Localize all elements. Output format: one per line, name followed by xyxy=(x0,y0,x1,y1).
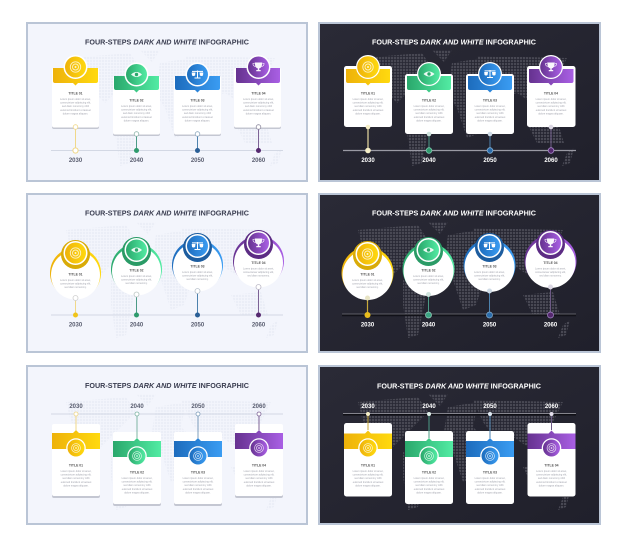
heading: FOUR-STEPS DARK AND WHITE INFOGRAPHIC xyxy=(85,208,249,218)
body text: dolore magna aliquam. xyxy=(416,119,442,122)
title 02: TITLE 02 xyxy=(422,470,436,474)
badge: target icon xyxy=(480,446,500,466)
body text: consectetuer adipiscing elit, xyxy=(536,102,567,105)
body text: sed diam nonummy nibh xyxy=(538,477,566,480)
badge: scale icon xyxy=(478,62,502,86)
step 1 card xyxy=(344,404,392,496)
year: 2030 xyxy=(69,322,83,328)
body text: Lorem ipsum dolor sit amet, xyxy=(60,98,91,101)
step 1 circle xyxy=(50,240,101,328)
step 4 card xyxy=(235,404,283,498)
body text: sed diam nonummy. xyxy=(125,282,148,285)
body text: consectetuer adipiscing elit, xyxy=(60,102,91,105)
badge: target icon xyxy=(66,438,86,458)
body text: Lorem ipsum dolor sit amet, xyxy=(535,268,566,270)
title 03: TITLE 03 xyxy=(190,98,205,102)
body text: dolore magna aliquam. xyxy=(124,119,150,122)
world map backdrop xyxy=(362,50,574,166)
body text: Lorem ipsum dolor sit amet, xyxy=(475,477,506,480)
title 03: TITLE 03 xyxy=(483,470,497,474)
connector xyxy=(136,134,138,150)
panel background xyxy=(319,194,600,352)
world map backdrop xyxy=(66,222,278,338)
title 03: TITLE 03 xyxy=(482,264,497,268)
connector xyxy=(136,294,138,315)
body text: consectetuer adipiscing elit, xyxy=(244,474,275,477)
step 2 card xyxy=(405,404,453,504)
body text: Lorem ipsum dolor sit amet, xyxy=(244,470,275,473)
body text: consectetuer adipiscing elit, xyxy=(122,481,153,484)
step 2 card xyxy=(113,404,161,506)
timeline axis xyxy=(51,150,283,152)
body text: dolore magna aliquam. xyxy=(185,491,211,494)
year: 2060 xyxy=(252,404,266,410)
badge: target icon xyxy=(356,242,380,266)
step 4 card xyxy=(528,404,576,496)
title 01: TITLE 01 xyxy=(361,92,375,96)
body text: euismod tincidunt ut laoreet xyxy=(414,488,445,491)
body text: Lorem ipsum dolor sit amet, xyxy=(121,275,152,278)
timeline axis xyxy=(343,414,576,416)
step 3 circle xyxy=(464,233,516,328)
body text: euismod tincidunt ut laoreet xyxy=(414,116,445,119)
step 1 card xyxy=(52,404,100,498)
body text: Lorem ipsum dolor sit amet, xyxy=(536,98,567,101)
step 2 circle xyxy=(402,237,454,328)
body text: dolore magna aliquam. xyxy=(477,491,503,494)
body text: sed diam nonummy. xyxy=(478,278,501,281)
body text: euismod tincidunt ut laoreet xyxy=(244,481,275,484)
badge: target icon xyxy=(358,438,378,458)
body text: consectetuer adipiscing elit, xyxy=(121,109,152,112)
connector xyxy=(74,298,76,315)
step 4 circle xyxy=(524,230,576,328)
body text: sed diam nonummy nibh xyxy=(62,477,90,480)
title 03: TITLE 03 xyxy=(191,470,205,474)
body text: Lorem ipsum dolor sit amet, xyxy=(353,470,384,473)
body text: Lorem ipsum dolor sit amet, xyxy=(536,470,567,473)
badge: eye icon xyxy=(124,238,148,262)
year: 2050 xyxy=(483,404,497,410)
badge: target icon xyxy=(127,446,147,466)
badge: scale icon xyxy=(186,234,210,258)
body text: Lorem ipsum dolor sit amet, xyxy=(243,98,274,101)
badge: target icon xyxy=(542,438,561,458)
timeline axis xyxy=(342,314,576,316)
year: 2030 xyxy=(69,158,83,164)
body text: Lorem ipsum dolor sit amet, xyxy=(182,271,213,274)
year: 2060 xyxy=(252,322,266,328)
step 2 card xyxy=(113,62,160,164)
panel background xyxy=(27,366,307,524)
year: 2030 xyxy=(361,322,375,328)
connector xyxy=(366,298,368,315)
timeline axis xyxy=(51,314,283,316)
body text: sed diam nonummy nibh xyxy=(537,105,565,108)
title 04: TITLE 04 xyxy=(252,464,266,468)
body text: consectetuer adipiscing elit, xyxy=(414,481,445,484)
title 04: TITLE 04 xyxy=(544,464,559,468)
body text: sed diam nonummy nibh xyxy=(245,477,273,480)
year: 2040 xyxy=(422,322,436,328)
step 3 card xyxy=(174,62,221,164)
title 02: TITLE 02 xyxy=(421,268,436,272)
body text: dolore magna aliquam. xyxy=(539,484,565,487)
panel: light infographic with rectangular cards xyxy=(27,23,307,181)
title 04: TITLE 04 xyxy=(544,92,558,96)
panel background xyxy=(27,23,307,181)
connector xyxy=(74,127,76,150)
year: 2060 xyxy=(544,158,558,164)
body text: euismod tincidunt ut laoreet xyxy=(475,488,506,491)
title 01: TITLE 01 xyxy=(360,272,375,276)
body text: euismod tincidunt ut laoreet xyxy=(121,116,152,119)
year: 2050 xyxy=(191,404,205,410)
year: 2030 xyxy=(361,404,375,410)
title 02: TITLE 02 xyxy=(129,98,144,102)
world map backdrop xyxy=(358,394,570,510)
title 02: TITLE 02 xyxy=(129,268,144,272)
heading: FOUR-STEPS DARK AND WHITE INFOGRAPHIC xyxy=(377,382,541,390)
body text: sed diam nonummy nibh xyxy=(62,105,90,108)
body text: sed diam nonummy nibh xyxy=(354,105,382,108)
badge: trophy icon xyxy=(538,231,562,255)
body text: sed diam nonummy. xyxy=(539,275,562,278)
body text: dolore magna aliquam. xyxy=(185,119,211,122)
year: 2030 xyxy=(69,404,83,410)
year: 2050 xyxy=(191,322,205,328)
badge: target icon xyxy=(64,241,88,265)
panel: dark infographic with banded cards xyxy=(319,366,600,524)
body text: consectetuer adipiscing elit, xyxy=(61,474,92,477)
body text: consectetuer adipiscing elit, xyxy=(60,283,91,286)
body text: consectetuer adipiscing elit, xyxy=(183,481,214,484)
connector xyxy=(367,127,369,150)
body text: euismod tincidunt ut laoreet xyxy=(61,481,92,484)
title 04: TITLE 04 xyxy=(251,92,266,96)
panel: light infographic with circular cards xyxy=(27,194,307,352)
body text: Lorem ipsum dolor sit amet, xyxy=(182,105,213,108)
body text: euismod tincidunt ut laoreet xyxy=(182,116,213,119)
badge: trophy icon xyxy=(539,55,563,79)
badge: eye icon xyxy=(124,62,148,86)
body text: sed diam nonummy nibh xyxy=(476,484,504,487)
body text: sed diam nonummy. xyxy=(186,278,209,281)
connector xyxy=(196,134,198,150)
timeline axis xyxy=(343,150,576,152)
step 4 card xyxy=(234,55,281,164)
body text: dolore magna aliquam. xyxy=(63,112,89,115)
body text: sed diam nonummy. xyxy=(247,275,270,278)
step 3 card xyxy=(466,62,514,164)
title 02: TITLE 02 xyxy=(422,98,436,102)
step 1 circle xyxy=(342,241,394,328)
body text: consectetuer adipiscing elit, xyxy=(475,481,506,484)
body text: Lorem ipsum dolor sit amet, xyxy=(413,275,444,278)
body text: Lorem ipsum dolor sit amet, xyxy=(183,477,214,480)
body text: Lorem ipsum dolor sit amet, xyxy=(414,477,445,480)
year: 2040 xyxy=(130,404,144,410)
connector xyxy=(550,127,552,150)
body text: sed diam nonummy nibh xyxy=(476,112,504,115)
world map backdrop xyxy=(358,222,570,338)
body text: consectetuer adipiscing elit, xyxy=(353,102,384,105)
step 2 card xyxy=(405,62,453,164)
connector xyxy=(258,127,260,150)
body text: sed diam nonummy. xyxy=(356,286,379,289)
connector xyxy=(488,291,490,315)
badge: trophy icon xyxy=(246,231,270,255)
body text: euismod tincidunt ut laoreet xyxy=(536,109,567,112)
title 03: TITLE 03 xyxy=(190,264,205,268)
connector xyxy=(428,134,430,150)
body text: Lorem ipsum dolor sit amet, xyxy=(414,105,445,108)
panel background xyxy=(27,194,307,352)
step 3 circle xyxy=(172,233,223,328)
body text: consectetuer adipiscing elit, xyxy=(474,275,505,278)
body text: euismod tincidunt ut laoreet xyxy=(536,481,567,484)
body text: Lorem ipsum dolor sit amet, xyxy=(352,279,383,282)
year: 2050 xyxy=(483,158,497,164)
body text: dolore magna aliquam. xyxy=(355,112,381,115)
step 4 circle xyxy=(233,230,284,328)
badge: scale icon xyxy=(186,62,210,86)
body text: dolore magna aliquam. xyxy=(246,112,272,115)
body text: Lorem ipsum dolor sit amet, xyxy=(121,105,152,108)
body text: Lorem ipsum dolor sit amet, xyxy=(353,98,384,101)
title 01: TITLE 01 xyxy=(361,464,375,468)
body text: consectetuer adipiscing elit, xyxy=(352,283,383,286)
body text: consectetuer adipiscing elit, xyxy=(182,275,213,278)
body text: sed diam nonummy. xyxy=(64,286,87,289)
body text: consectetuer adipiscing elit, xyxy=(475,109,506,112)
step 4 card xyxy=(527,55,576,164)
connector xyxy=(196,291,198,315)
year: 2060 xyxy=(544,322,558,328)
year: 2040 xyxy=(130,158,144,164)
body text: Lorem ipsum dolor sit amet, xyxy=(61,470,92,473)
heading: FOUR-STEPS DARK AND WHITE INFOGRAPHIC xyxy=(372,208,536,218)
heading: FOUR-STEPS DARK AND WHITE INFOGRAPHIC xyxy=(85,38,249,47)
badge: eye icon xyxy=(416,238,440,262)
badge: target icon xyxy=(419,446,439,466)
heading: FOUR-STEPS DARK AND WHITE INFOGRAPHIC xyxy=(372,38,536,47)
body text: dolore magna aliquam. xyxy=(124,491,150,494)
body text: sed diam nonummy nibh xyxy=(184,112,212,115)
body text: sed diam nonummy nibh xyxy=(415,484,443,487)
panel: dark infographic with circular cards xyxy=(319,194,600,352)
body text: consectetuer adipiscing elit, xyxy=(535,271,566,274)
body text: euismod tincidunt ut laoreet xyxy=(475,116,506,119)
body text: sed diam nonummy. xyxy=(417,282,440,285)
body text: sed diam nonummy nibh xyxy=(184,484,212,487)
year: 2030 xyxy=(361,158,375,164)
title 04: TITLE 04 xyxy=(251,261,266,265)
badge: scale icon xyxy=(478,234,502,258)
body text: dolore magna aliquam. xyxy=(416,491,442,494)
badge: target icon xyxy=(64,55,88,79)
step 1 card xyxy=(344,55,392,164)
body text: dolore magna aliquam. xyxy=(477,119,503,122)
year: 2040 xyxy=(422,158,436,164)
badge: target icon xyxy=(188,446,208,466)
body text: dolore magna aliquam. xyxy=(355,484,381,487)
connector xyxy=(489,134,491,150)
year: 2050 xyxy=(483,322,497,328)
body text: consectetuer adipiscing elit, xyxy=(414,109,445,112)
step 2 circle xyxy=(111,237,162,328)
title 03: TITLE 03 xyxy=(483,98,497,102)
world map backdrop xyxy=(70,50,282,166)
body text: consectetuer adipiscing elit, xyxy=(243,271,274,274)
panel: light infographic with banded cards xyxy=(27,366,307,524)
body text: Lorem ipsum dolor sit amet, xyxy=(122,477,153,480)
title 04: TITLE 04 xyxy=(543,261,558,265)
body text: consectetuer adipiscing elit, xyxy=(243,102,274,105)
body text: dolore magna aliquam. xyxy=(538,112,564,115)
badge: eye icon xyxy=(417,62,441,86)
body text: euismod tincidunt ut laoreet xyxy=(243,109,274,112)
body text: Lorem ipsum dolor sit amet, xyxy=(474,271,505,274)
body text: euismod tincidunt ut laoreet xyxy=(60,109,91,112)
badge: trophy icon xyxy=(246,55,270,79)
timeline axis xyxy=(51,413,283,415)
step 3 card xyxy=(174,404,222,506)
panel background xyxy=(319,23,600,181)
year: 2060 xyxy=(252,158,266,164)
year: 2060 xyxy=(545,404,559,410)
body text: dolore magna aliquam. xyxy=(63,484,89,487)
body text: consectetuer adipiscing elit, xyxy=(413,279,444,282)
year: 2040 xyxy=(130,322,144,328)
title 01: TITLE 01 xyxy=(69,464,83,468)
body text: consectetuer adipiscing elit, xyxy=(536,474,567,477)
title 01: TITLE 01 xyxy=(68,92,83,96)
year: 2050 xyxy=(191,158,205,164)
body text: sed diam nonummy nibh xyxy=(123,112,151,115)
body text: euismod tincidunt ut laoreet xyxy=(183,488,214,491)
connector xyxy=(550,287,552,315)
body text: euismod tincidunt ut laoreet xyxy=(122,488,153,491)
connector xyxy=(258,287,260,315)
body text: consectetuer adipiscing elit, xyxy=(353,474,384,477)
body text: Lorem ipsum dolor sit amet, xyxy=(243,268,274,270)
body text: sed diam nonummy nibh xyxy=(123,484,151,487)
body text: Lorem ipsum dolor sit amet, xyxy=(60,279,91,282)
title 02: TITLE 02 xyxy=(130,470,144,474)
heading: FOUR-STEPS DARK AND WHITE INFOGRAPHIC xyxy=(85,381,249,390)
body text: sed diam nonummy nibh xyxy=(354,477,382,480)
connector xyxy=(428,294,430,315)
body text: euismod tincidunt ut laoreet xyxy=(353,109,384,112)
world map backdrop xyxy=(66,394,278,510)
body text: Lorem ipsum dolor sit amet, xyxy=(475,105,506,108)
badge: target icon xyxy=(249,438,269,458)
title 01: TITLE 01 xyxy=(68,272,83,276)
body text: consectetuer adipiscing elit, xyxy=(121,279,152,282)
body text: sed diam nonummy nibh xyxy=(245,105,273,108)
year: 2040 xyxy=(422,404,436,410)
panel background xyxy=(319,366,600,524)
step 3 card xyxy=(466,404,514,504)
body text: sed diam nonummy nibh xyxy=(415,112,443,115)
body text: dolore magna aliquam. xyxy=(246,484,272,487)
badge: target icon xyxy=(356,55,380,79)
body text: consectetuer adipiscing elit, xyxy=(182,109,213,112)
body text: euismod tincidunt ut laoreet xyxy=(353,481,384,484)
step 1 card xyxy=(52,55,99,164)
panel: dark infographic with rectangular cards xyxy=(319,23,600,181)
